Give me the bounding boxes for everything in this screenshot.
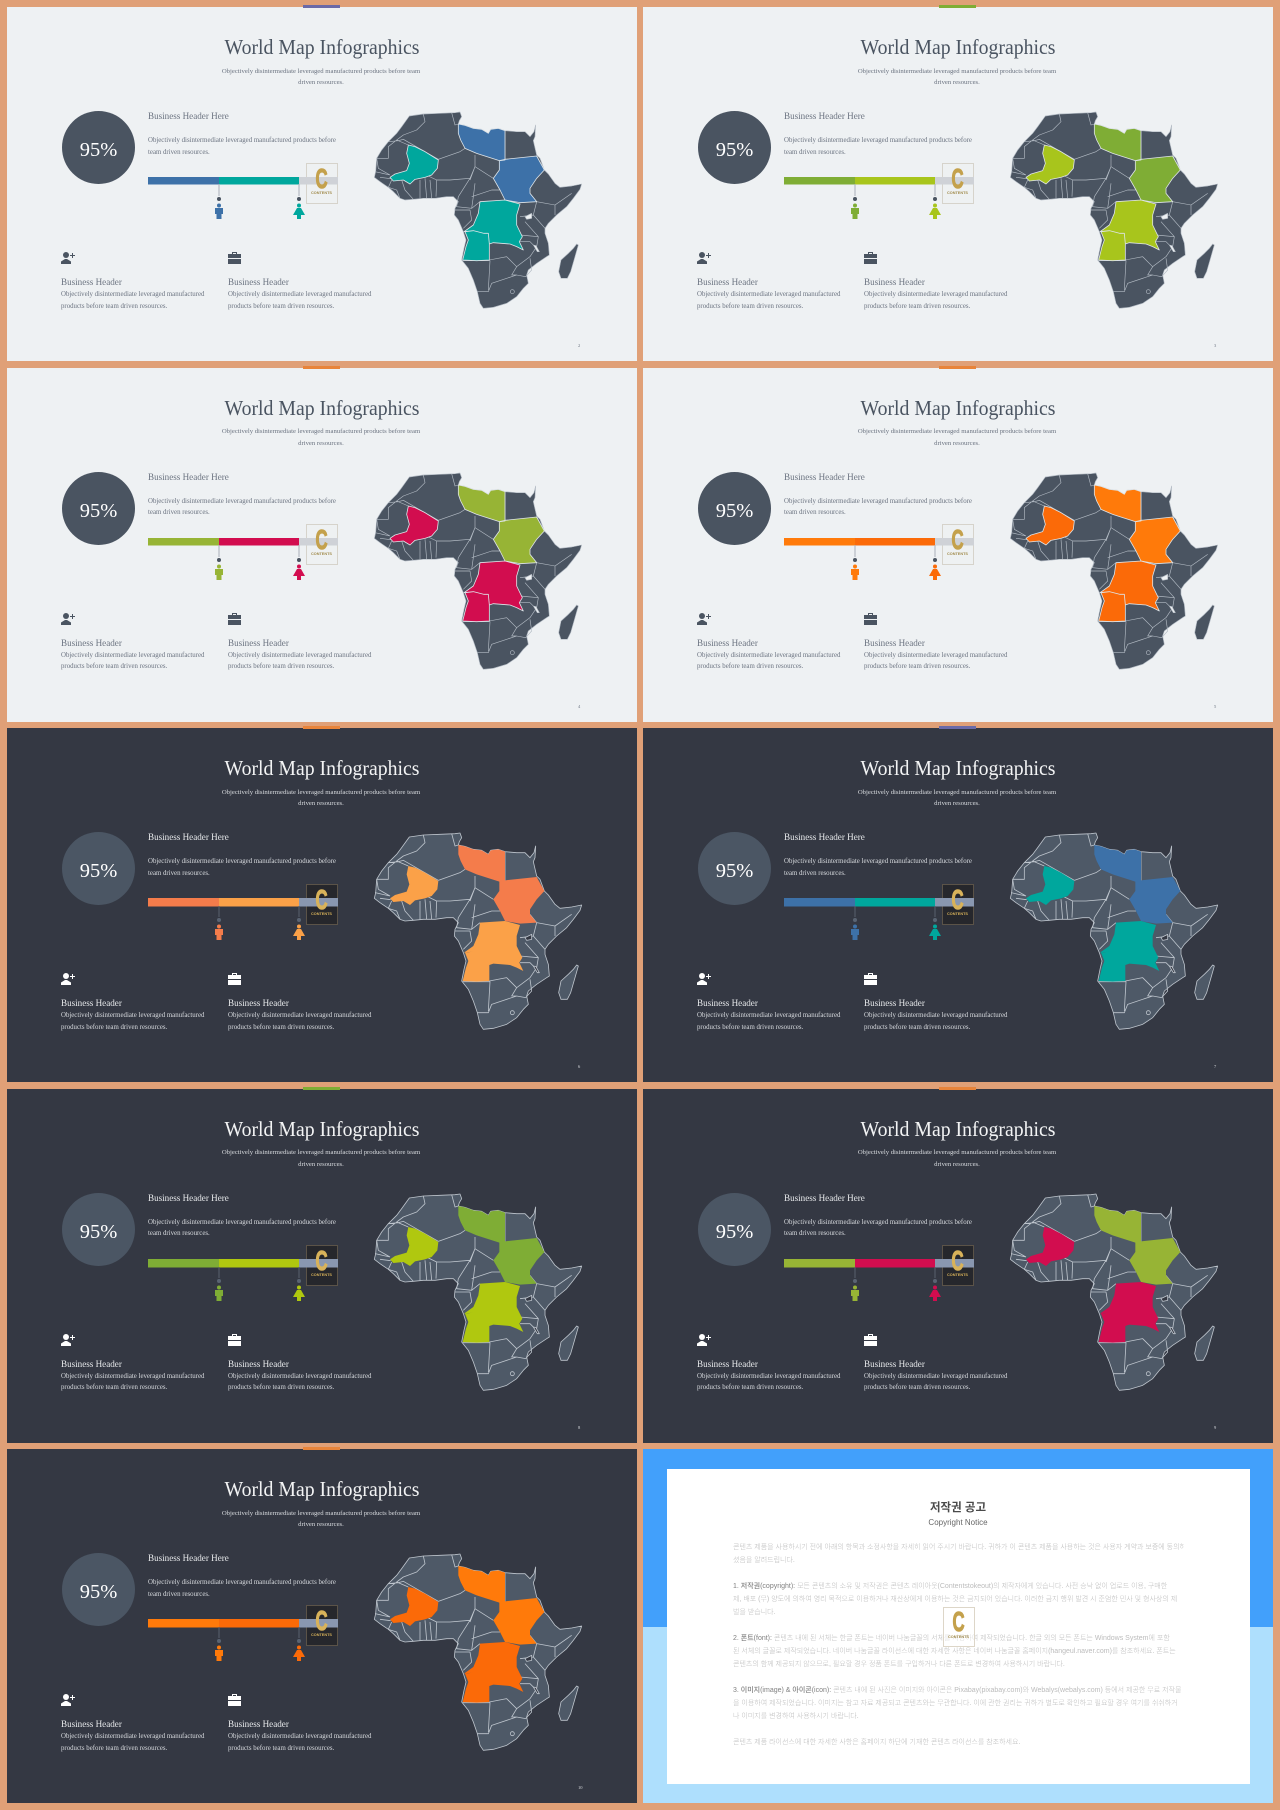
- description: [784, 136, 972, 156]
- percent circle: 95%: [716, 1220, 753, 1242]
- left text: Objectively disintermediate leveraged manufactured: [697, 291, 840, 298]
- watermark: C: [952, 884, 964, 915]
- panel: slide 3 green light: [643, 7, 1273, 361]
- icon: add user: [61, 1334, 75, 1346]
- percent circle: 95%: [80, 500, 117, 522]
- title: World Map Infographics: [861, 1118, 1055, 1140]
- left text: [61, 1370, 204, 1394]
- watermark: [306, 524, 338, 565]
- map of Africa: [360, 1542, 600, 1762]
- right text: Objectively disintermediate leveraged manufactured: [228, 1372, 371, 1380]
- description: Objectively disintermediate leveraged manufactured products before: [148, 137, 336, 144]
- description: Objectively disintermediate leveraged manufactured products before: [148, 858, 336, 865]
- subtitle: Objectively disintermediate leveraged manufactured products before team: [222, 788, 420, 796]
- left text: products before team driven resources.: [697, 1384, 803, 1391]
- notice body text: 콘텐츠 제품을 사용하시기 전에 아래의 항목과 소정사항을 자세히 읽어 주시기 바랍니다. 귀하가 이 콘텐츠 제품을 사용하는 것은 사용자 계약과 보증에 동의하: [733, 1544, 1184, 1551]
- description: team driven resources.: [784, 1230, 846, 1237]
- right text: [228, 1010, 371, 1033]
- notice title: 저작권 공고: [930, 1502, 986, 1514]
- map of Africa: [996, 1182, 1236, 1402]
- subtitle: driven resources.: [298, 440, 344, 446]
- right header: Business Header: [228, 1358, 289, 1368]
- description: [784, 856, 972, 879]
- subtitle: driven resources.: [298, 79, 344, 86]
- right text: [864, 290, 1008, 310]
- icon: briefcase: [228, 973, 241, 985]
- percent circle: 95%: [716, 860, 753, 882]
- top tab: [939, 5, 976, 8]
- right text: [864, 1370, 1007, 1394]
- description: Objectively disintermediate leveraged manufactured products before: [784, 137, 972, 144]
- description: [148, 136, 336, 156]
- watermark: [942, 163, 974, 204]
- description: Objectively disintermediate leveraged manufactured products before: [784, 858, 972, 865]
- top tab: [303, 1086, 340, 1090]
- subtitle: Objectively disintermediate leveraged manufactured products before team: [858, 788, 1056, 796]
- left text: [697, 1010, 840, 1033]
- panel: slide 8 green dark: [7, 1088, 637, 1442]
- page number: 10: [578, 1785, 582, 1790]
- notice body text: 나 이미지를 변경하여 사용하시기 바랍니다.: [733, 1713, 859, 1720]
- progress bar with people: [784, 538, 942, 580]
- subtitle: driven resources.: [298, 1521, 344, 1528]
- subtitle: [858, 428, 1056, 446]
- left header: Business Header: [61, 1719, 122, 1729]
- map of Africa: [360, 1182, 600, 1402]
- right text: [864, 652, 1008, 670]
- page number: 4: [578, 704, 580, 708]
- right text: Objectively disintermediate leveraged manufactured: [228, 652, 371, 658]
- right header: Business Header: [228, 277, 289, 287]
- description: [148, 498, 336, 516]
- subtitle: [807, 1147, 1107, 1170]
- title: World Map Infographics: [225, 1118, 419, 1140]
- icon: briefcase: [864, 973, 877, 985]
- top tab: [303, 1447, 340, 1450]
- right text: products before team driven resources.: [864, 663, 970, 670]
- description: [148, 858, 336, 876]
- icon: add user: [697, 252, 711, 264]
- description: team driven resources.: [148, 1590, 210, 1598]
- percent circle: 95%: [80, 1220, 117, 1242]
- right text: [228, 290, 372, 310]
- percent circle: [62, 1192, 135, 1266]
- watermark: C: [952, 163, 964, 194]
- header: Business Header Here: [784, 1192, 865, 1202]
- progress bar with people: [784, 884, 984, 944]
- watermark: CONTENTS: [311, 552, 332, 556]
- header: Business Header Here: [148, 1553, 229, 1563]
- watermark: C: [952, 1244, 964, 1276]
- description: Objectively disintermediate leveraged manufactured products before: [784, 1218, 972, 1226]
- page number: 5: [1214, 704, 1216, 708]
- title: World Map Infographics: [861, 398, 1055, 420]
- left text: products before team driven resources.: [61, 302, 167, 310]
- progress bar with people: [148, 1605, 348, 1665]
- right text: Objectively disintermediate leveraged manufactured: [864, 652, 1007, 658]
- progress bar with people: [148, 898, 306, 940]
- subtitle: driven resources.: [934, 79, 980, 86]
- left text: Objectively disintermediate leveraged manufactured: [61, 1012, 204, 1019]
- header: Business Header Here: [784, 472, 865, 482]
- percent circle: 95%: [716, 139, 753, 161]
- header: Business Header Here: [148, 472, 229, 482]
- left header: Business Header: [61, 1358, 122, 1368]
- subtitle: [807, 786, 1107, 810]
- left text: Objectively disintermediate leveraged manufactured: [61, 1733, 204, 1740]
- left text: [61, 290, 204, 310]
- icon: briefcase: [864, 1334, 877, 1346]
- left header: Business Header: [61, 277, 122, 287]
- watermark: CONTENTS: [947, 191, 968, 195]
- watermark: C: [316, 1244, 328, 1276]
- page number: 3: [1214, 343, 1216, 348]
- panel: slide 4 olive crimson light: [7, 368, 637, 722]
- right header: Business Header: [228, 1719, 289, 1729]
- notice body text: 된 서체의 글꼴로 제작되었습니다. 네이버 나눔글꼴 라이선스에 대한 자세한 사항은 네이버 나눔글꼴 홈페이지(hangeul.naver.com)를 참조하세요. 폰트는: [733, 1648, 1176, 1655]
- icon: add user: [61, 252, 75, 264]
- subtitle: driven resources.: [298, 800, 344, 807]
- watermark: [943, 1607, 975, 1647]
- notice body text: 제, 배포 (무) 양도에 의하여 영리 목적으로 이용하거나 재산상에게 이용하는 것은 금지되어 있습니다. 이러한 금지 행위 발견 시 준엄한 민사 및 형사상의 제: [733, 1596, 1177, 1603]
- notice subtitle: Copyright Notice: [928, 1518, 988, 1526]
- panel: slide 9 olive crimson dark: [643, 1088, 1273, 1442]
- left text: Objectively disintermediate leveraged manufactured: [697, 652, 840, 658]
- panel: copyright notice: [643, 1449, 1273, 1803]
- watermark: C: [316, 1605, 328, 1636]
- watermark: CONTENTS: [311, 191, 332, 195]
- subtitle: [222, 68, 420, 86]
- header: Business Header Here: [784, 111, 865, 121]
- description: team driven resources.: [784, 509, 846, 516]
- description: [784, 498, 972, 516]
- description: team driven resources.: [784, 870, 846, 876]
- subtitle: Objectively disintermediate leveraged manufactured products before team: [222, 68, 420, 74]
- notice body text: 벌을 받습니다.: [733, 1609, 776, 1616]
- subtitle: [171, 1147, 471, 1170]
- notice body text: 1. 저작권(copyright): 모든 콘텐츠의 소유 및 저작권은 콘텐츠 레이아웃(Contentstokeout)의 제작자에게 있습니다. 사전 승낙 없이 업로드 이용, 구매한: [733, 1583, 1167, 1590]
- watermark: [306, 1244, 338, 1286]
- watermark: CONTENTS: [311, 1272, 332, 1276]
- right header: Business Header: [864, 998, 925, 1008]
- page number: 6: [578, 1064, 580, 1069]
- white card: [666, 1469, 1250, 1784]
- watermark: [942, 884, 974, 925]
- subtitle: [171, 1508, 471, 1530]
- header: Business Header Here: [148, 832, 229, 842]
- icon: add user: [61, 1694, 75, 1706]
- right text: products before team driven resources.: [228, 663, 334, 670]
- right text: products before team driven resources.: [228, 302, 334, 310]
- left text: products before team driven resources.: [61, 1744, 167, 1752]
- notice body text: 을 이용하여 제작되었습니다. 이미지는 참고 자료 제공되고 콘텐츠와는 무관합니다. 이에 관한 권리는 귀하가 별도로 확인하고 필요할 경우 여기를 쉬쉬하거: [733, 1700, 1178, 1707]
- right text: products before team driven resources.: [228, 1384, 334, 1391]
- progress bar with people: [148, 1244, 348, 1304]
- top tab: [939, 1086, 976, 1090]
- right header: Business Header: [864, 277, 925, 287]
- description: Objectively disintermediate leveraged manufactured products before: [148, 1579, 336, 1586]
- left text: [697, 1370, 840, 1394]
- title: World Map Infographics: [225, 398, 419, 420]
- description: team driven resources.: [148, 148, 210, 156]
- map of Africa: [996, 821, 1236, 1041]
- icon: add user: [697, 613, 711, 625]
- subtitle: Objectively disintermediate leveraged manufactured products before team: [222, 428, 420, 435]
- page number: 8: [578, 1424, 580, 1430]
- watermark: [306, 163, 338, 204]
- header: Business Header Here: [784, 832, 865, 842]
- watermark: C: [316, 884, 328, 915]
- right text: products before team driven resources.: [228, 1024, 334, 1030]
- subtitle: [222, 428, 420, 446]
- percent circle: [62, 1553, 135, 1626]
- watermark: CONTENTS: [947, 1272, 968, 1276]
- top tab: [303, 366, 340, 368]
- map of Africa: [1010, 472, 1218, 670]
- right text: Objectively disintermediate leveraged manufactured: [864, 1012, 1007, 1019]
- left text: products before team driven resources.: [697, 663, 803, 670]
- description: Objectively disintermediate leveraged manufactured products before: [148, 498, 336, 504]
- watermark: C: [316, 163, 328, 194]
- right text: [228, 652, 372, 670]
- description: Objectively disintermediate leveraged manufactured products before: [784, 498, 972, 504]
- description: [148, 1577, 336, 1600]
- left text: Objectively disintermediate leveraged manufactured: [61, 291, 204, 298]
- progress bar with people: [784, 1244, 984, 1304]
- watermark: CONTENTS: [948, 1635, 969, 1639]
- right text: products before team driven resources.: [864, 1024, 970, 1030]
- title: World Map Infographics: [861, 758, 1055, 780]
- page number: 9: [1214, 1424, 1216, 1430]
- progress bar with people: [148, 538, 306, 580]
- icon: add user: [697, 973, 711, 985]
- panel: slide 7 blue teal dark: [643, 728, 1273, 1082]
- right text: products before team driven resources.: [864, 1384, 970, 1391]
- icon: add user: [697, 1334, 711, 1346]
- subtitle: driven resources.: [934, 440, 980, 446]
- icon: briefcase: [864, 613, 877, 625]
- percent circle: [698, 472, 771, 544]
- watermark: CONTENTS: [947, 552, 968, 556]
- subtitle: driven resources.: [934, 1160, 980, 1168]
- watermark: CONTENTS: [947, 912, 968, 916]
- subtitle: [222, 788, 420, 807]
- watermark: [942, 524, 974, 565]
- subtitle: driven resources.: [298, 1160, 344, 1168]
- right text: [864, 1010, 1007, 1033]
- icon: briefcase: [228, 252, 241, 264]
- title: World Map Infographics: [225, 1479, 419, 1501]
- watermark: [306, 1605, 338, 1646]
- description: [784, 1216, 972, 1240]
- left header: Business Header: [61, 638, 122, 648]
- description: team driven resources.: [784, 148, 846, 156]
- percent circle: [698, 1192, 771, 1266]
- notice body text: 콘텐츠의 함께 제공되지 않으므로, 필요할 경우 정품 폰트를 구입하거나 다른 폰트로 변경하여 사용하시기 바랍니다.: [733, 1661, 1065, 1668]
- panel: slide 5 orange light: [643, 368, 1273, 722]
- subtitle: Objectively disintermediate leveraged manufactured products before team: [222, 1510, 420, 1516]
- header: Business Header Here: [148, 1192, 229, 1202]
- left text: products before team driven resources.: [61, 1024, 167, 1030]
- description: team driven resources.: [148, 509, 210, 516]
- percent circle: 95%: [80, 860, 117, 882]
- left header: Business Header: [697, 277, 758, 287]
- right header: Business Header: [864, 638, 925, 648]
- icon: briefcase: [864, 252, 877, 264]
- watermark: CONTENTS: [311, 912, 332, 916]
- icon: add user: [61, 613, 75, 625]
- description: Objectively disintermediate leveraged manufactured products before: [148, 1218, 336, 1226]
- left text: Objectively disintermediate leveraged manufactured: [697, 1012, 840, 1019]
- left text: [61, 1010, 204, 1033]
- right header: Business Header: [864, 1358, 925, 1368]
- panel: slide 10 orange dark: [7, 1449, 637, 1803]
- icon: briefcase: [228, 613, 241, 625]
- progress bar with people: [148, 177, 306, 219]
- right text: Objectively disintermediate leveraged manufactured: [228, 1012, 371, 1019]
- percent circle: [698, 111, 771, 184]
- percent circle: [698, 832, 771, 905]
- subtitle: Objectively disintermediate leveraged manufactured products before team: [858, 428, 1056, 435]
- watermark: C: [952, 524, 964, 555]
- icon: briefcase: [228, 1694, 241, 1706]
- right text: [228, 1370, 371, 1394]
- icon: briefcase: [228, 1334, 241, 1346]
- top tab: [939, 726, 976, 729]
- description: [148, 1216, 336, 1240]
- right header: Business Header: [228, 638, 289, 648]
- left header: Business Header: [697, 638, 758, 648]
- top tab: [939, 366, 976, 368]
- percent circle: 95%: [80, 1581, 117, 1603]
- map of Africa: [1010, 112, 1218, 309]
- left text: Objectively disintermediate leveraged manufactured: [61, 652, 204, 658]
- notice body text: 2. 폰트(font): 콘텐츠 내에 된 서체는 한글 폰트는 네이버 나눔글꼴의 서체를 사용하여 제작되었습니다. 한글 외의 모든 폰트는 Windows System에 포함: [733, 1635, 1170, 1642]
- percent circle: [62, 832, 135, 905]
- page number: 7: [1214, 1064, 1216, 1069]
- left text: [697, 290, 840, 310]
- left text: Objectively disintermediate leveraged manufactured: [697, 1372, 840, 1380]
- subtitle: Objectively disintermediate leveraged manufactured products before team: [222, 1149, 420, 1156]
- right text: Objectively disintermediate leveraged manufactured: [228, 291, 371, 298]
- watermark: [942, 1244, 974, 1286]
- panel: slide 6 coral dark: [7, 728, 637, 1082]
- subtitle: Objectively disintermediate leveraged manufactured products before team: [858, 68, 1056, 74]
- left text: products before team driven resources.: [61, 663, 167, 670]
- left header: Business Header: [697, 1358, 758, 1368]
- description: team driven resources.: [148, 870, 210, 876]
- right text: Objectively disintermediate leveraged manufactured: [864, 1372, 1007, 1380]
- header: Business Header Here: [148, 111, 229, 121]
- map of Africa: [374, 472, 582, 670]
- title: World Map Infographics: [861, 37, 1055, 59]
- right text: Objectively disintermediate leveraged manufactured: [228, 1733, 371, 1740]
- left text: [61, 652, 204, 670]
- notice body text: 3. 이미지(image) & 아이콘(icon): 콘텐츠 내에 된 사진은 이미지와 아이콘은 Pixabay(pixabay.com)와 Webalys(webalys.com) 등에서 제공한 무료 저작물: [733, 1687, 1181, 1694]
- percent circle: [62, 472, 135, 544]
- right text: products before team driven resources.: [228, 1744, 334, 1752]
- left header: Business Header: [697, 998, 758, 1008]
- notice body text: 셨음을 알려드립니다.: [733, 1557, 795, 1564]
- left text: Objectively disintermediate leveraged manufactured: [61, 1372, 204, 1380]
- progress bar with people: [784, 177, 942, 219]
- top tab: [303, 726, 340, 729]
- subtitle: driven resources.: [934, 800, 980, 807]
- right text: Objectively disintermediate leveraged manufactured: [864, 291, 1007, 298]
- left text: products before team driven resources.: [697, 302, 803, 310]
- right text: [228, 1731, 371, 1754]
- watermark: C: [316, 524, 328, 555]
- panel: slide 2 blue teal light: [7, 7, 637, 361]
- subtitle: [858, 68, 1056, 86]
- right text: products before team driven resources.: [864, 302, 970, 310]
- percent circle: 95%: [716, 500, 753, 522]
- percent circle: 95%: [80, 139, 117, 161]
- watermark: [306, 884, 338, 925]
- notice body text: [643, 1450, 1273, 1780]
- right header: Business Header: [228, 998, 289, 1008]
- map of Africa: [360, 821, 600, 1041]
- percent circle: [62, 111, 135, 184]
- left text: [697, 652, 840, 670]
- left text: [61, 1731, 204, 1754]
- description: team driven resources.: [148, 1230, 210, 1237]
- title: World Map Infographics: [225, 758, 419, 780]
- left text: products before team driven resources.: [697, 1024, 803, 1030]
- page number: 2: [578, 343, 580, 348]
- watermark: CONTENTS: [311, 1633, 332, 1637]
- icon: add user: [61, 973, 75, 985]
- title: World Map Infographics: [225, 37, 419, 59]
- map of Africa: [374, 112, 582, 309]
- top tab: [303, 5, 340, 8]
- left header: Business Header: [61, 998, 122, 1008]
- subtitle: Objectively disintermediate leveraged manufactured products before team: [858, 1149, 1056, 1156]
- notice body text: 콘텐츠 제품 라이선스에 대한 자세한 사항은 홈페이지 하단에 기재한 콘텐츠 라이선스를 참조하세요.: [733, 1739, 1020, 1746]
- left text: products before team driven resources.: [61, 1384, 167, 1391]
